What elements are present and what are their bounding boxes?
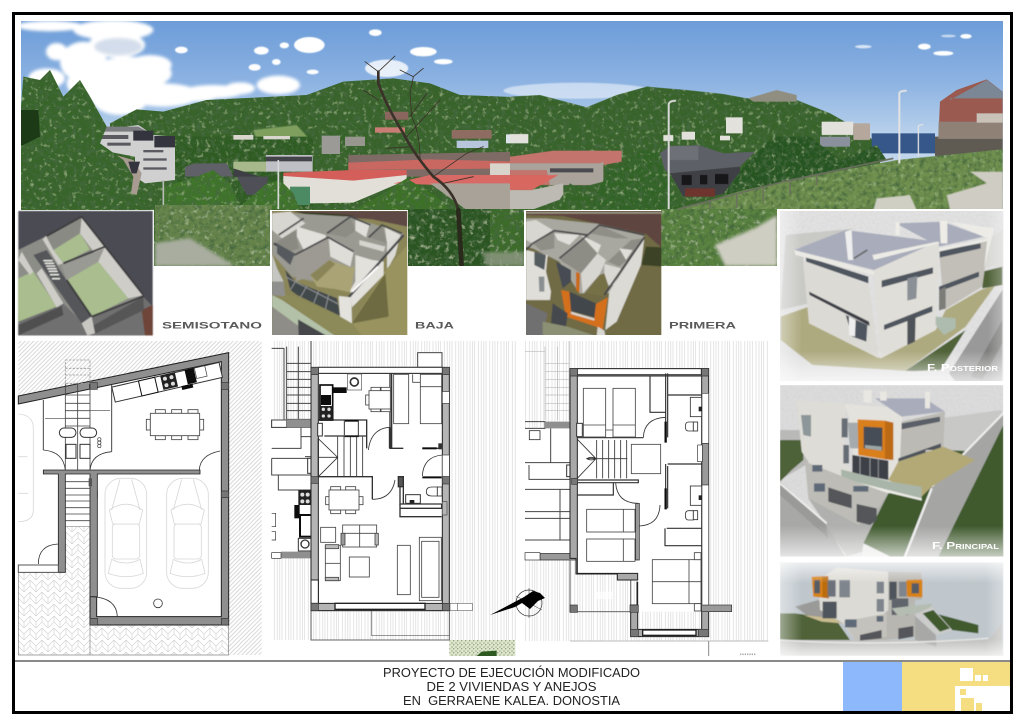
mountain <box>110 78 520 210</box>
north arrow compass <box>490 588 545 618</box>
caption: f. principal: F. Principal <box>932 541 1000 552</box>
partitions <box>577 373 702 546</box>
kitchen table <box>366 387 390 412</box>
3D exterior: vista general <box>780 562 1003 656</box>
street lamps <box>669 101 676 210</box>
dining <box>326 487 363 514</box>
paving <box>18 527 229 655</box>
stairs <box>65 360 90 521</box>
left town red roofs <box>510 151 622 185</box>
interior walls <box>43 470 200 597</box>
toilets and basins <box>59 428 97 458</box>
orange volume <box>858 419 885 459</box>
project title: EN GERRAENE KALEA. DONOSTIA <box>403 694 621 708</box>
walls <box>311 367 449 611</box>
vertical lines below plan <box>570 639 768 642</box>
3D view: planta primera <box>524 210 663 337</box>
scattered houses <box>510 117 870 147</box>
lower base <box>805 462 888 525</box>
partitions <box>318 373 442 517</box>
stairs <box>577 439 627 478</box>
castle hill <box>510 87 880 210</box>
label: primera: PRIMERA <box>669 320 736 332</box>
orange volume <box>569 292 596 317</box>
lower area <box>526 303 548 336</box>
floor plan: planta primera <box>525 341 768 656</box>
left white facade <box>526 250 551 300</box>
trees <box>602 153 672 186</box>
stairs <box>318 437 363 477</box>
lower vegetation band <box>21 205 777 266</box>
logo block <box>843 662 1010 712</box>
dark slate house <box>650 145 755 173</box>
caption: f. posterior: F. Posterior <box>927 363 998 374</box>
main left face <box>803 260 879 358</box>
mid-roof buildings <box>185 163 233 177</box>
dining table <box>146 410 204 440</box>
bare tree <box>363 56 483 267</box>
roof <box>794 230 937 270</box>
glazed ground floor <box>852 455 888 480</box>
project title <box>383 665 640 708</box>
town buildings <box>322 136 340 154</box>
kitchen counter <box>112 362 223 405</box>
main front face <box>872 242 939 358</box>
label: baja: BAJA <box>415 320 454 332</box>
cars <box>18 414 208 588</box>
3D view: semisotano <box>17 210 154 336</box>
glazed porch <box>285 270 340 316</box>
project title: DE 2 VIVIENDAS Y ANEJOS <box>426 680 596 694</box>
building <box>818 568 888 640</box>
rear block <box>896 222 984 247</box>
outer walls <box>18 353 229 625</box>
deck lower <box>284 296 352 324</box>
light right wall <box>350 255 384 307</box>
fence <box>677 158 893 209</box>
right half of photo <box>503 34 1003 210</box>
interior and balcony <box>311 367 449 611</box>
floor plan: semisotano <box>18 341 262 655</box>
clouds <box>17 20 453 115</box>
title block divider <box>14 660 1010 662</box>
walls <box>570 369 709 637</box>
terrace <box>888 447 975 497</box>
floor plan: planta baja <box>272 341 516 656</box>
sea <box>872 133 935 153</box>
front white wall <box>339 296 352 323</box>
bedroom bed <box>394 374 442 424</box>
neighbour dwelling <box>525 428 570 560</box>
facade main block <box>797 401 852 477</box>
large hotel building <box>100 125 175 183</box>
beds <box>583 388 701 611</box>
foreground trees <box>20 70 148 210</box>
3D exterior: fachada principal <box>780 385 1003 557</box>
terrace <box>570 560 631 612</box>
far right tower building <box>935 137 1003 160</box>
right white wall <box>605 238 644 330</box>
project title: PROYECTO DE EJECUCIÓN MODIFICADO <box>383 665 640 680</box>
wood deck right <box>352 243 409 336</box>
bath <box>406 495 420 503</box>
distant houses <box>233 112 520 148</box>
hillside grass <box>677 149 1003 210</box>
planted area <box>449 640 515 656</box>
kitchen <box>320 385 333 420</box>
3D view: planta baja <box>270 210 409 337</box>
bathrooms <box>685 397 702 520</box>
panel: panoramic site photo <box>17 20 1003 267</box>
interior <box>577 376 702 612</box>
left half of photo <box>17 20 520 210</box>
neighbour dwelling <box>272 427 311 558</box>
label: semisotano: SEMISOTANO <box>162 320 262 332</box>
mid valley <box>173 137 313 210</box>
living <box>321 525 441 601</box>
3D exterior: fachada posterior <box>779 210 1006 382</box>
